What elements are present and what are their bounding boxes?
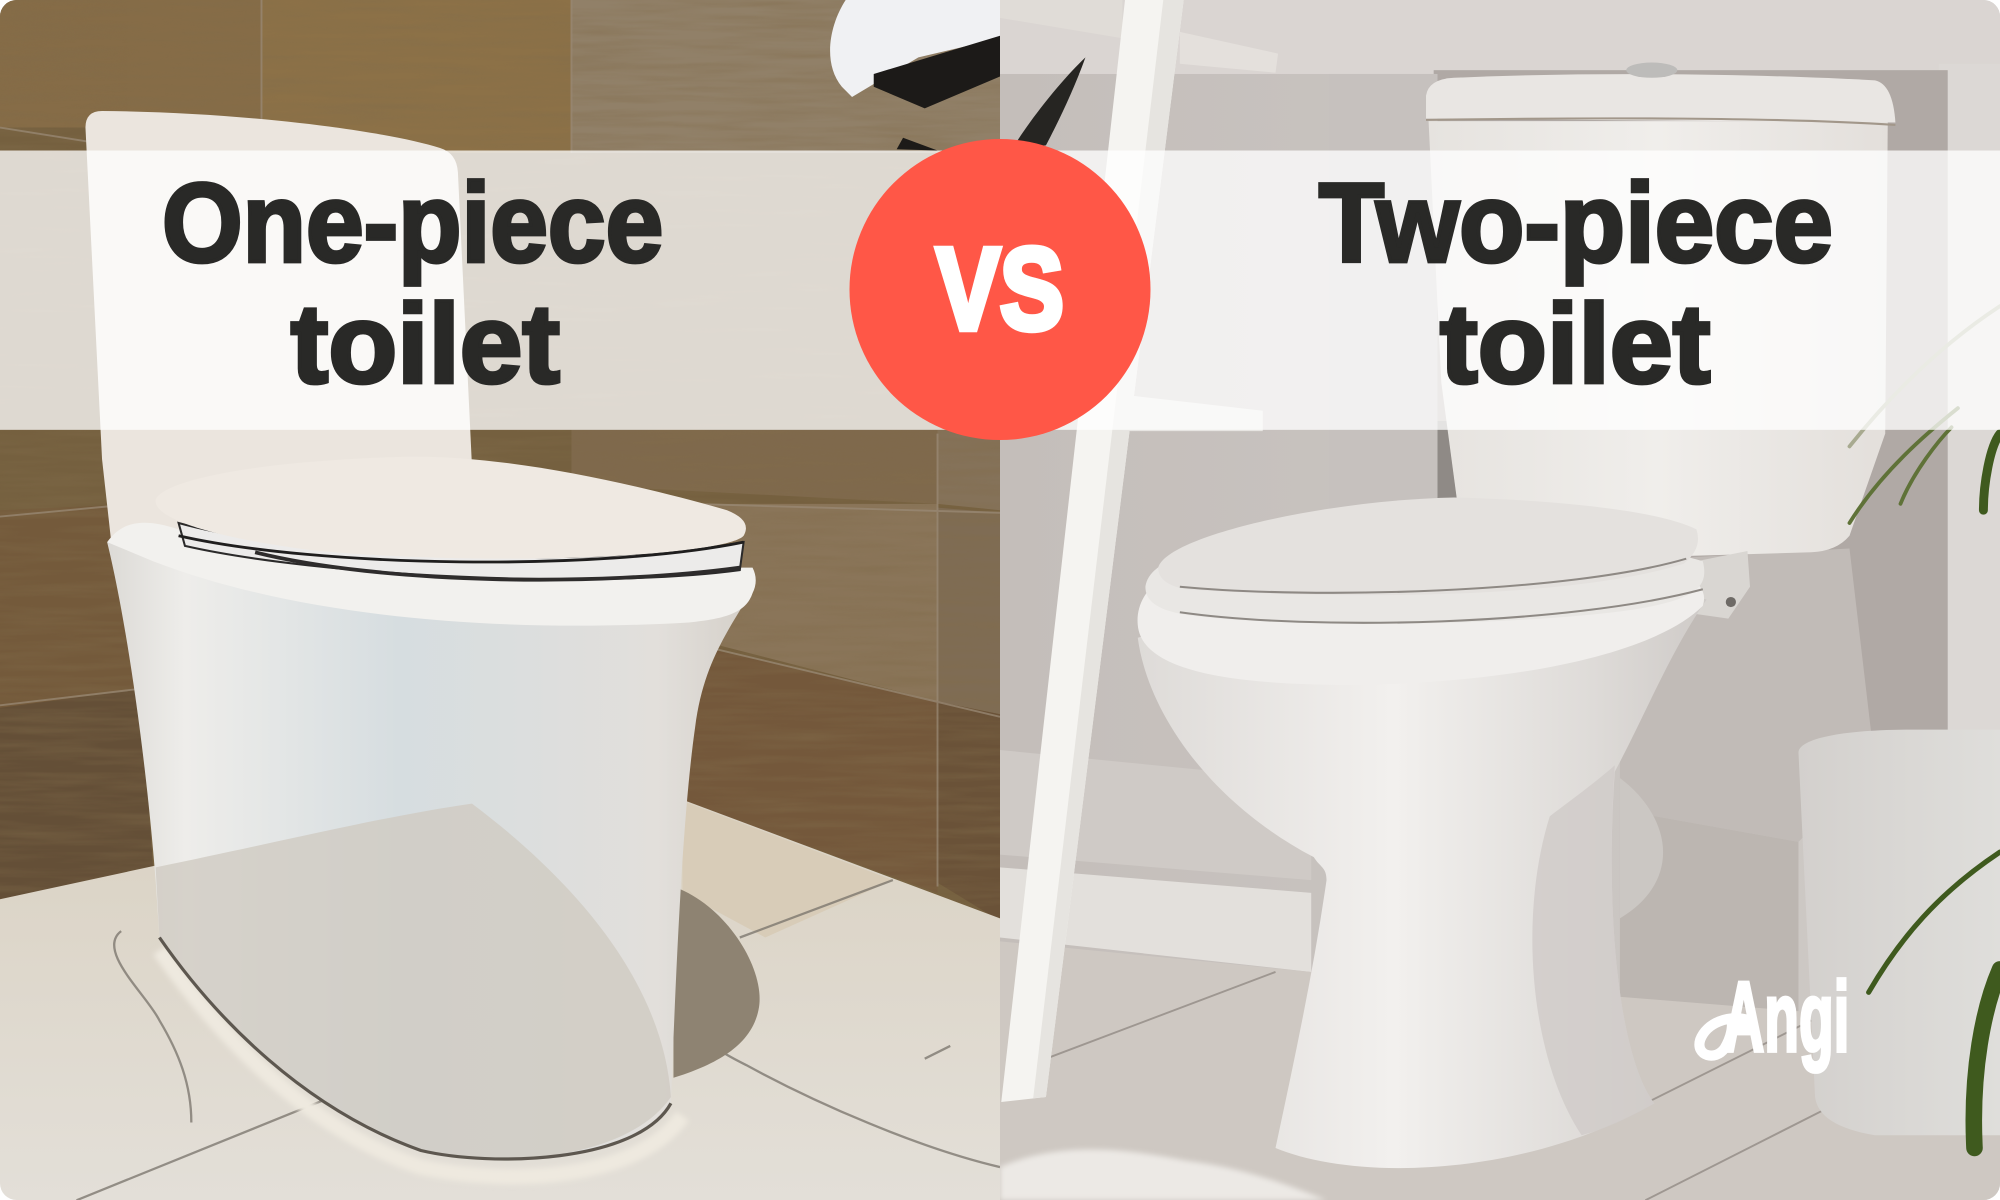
toilet body	[107, 542, 741, 1100]
heading: one-piece toilet: toilet	[291, 281, 560, 407]
wood floor	[1000, 941, 2000, 1200]
heading: one-piece toilet	[162, 159, 663, 407]
seat ring	[179, 523, 744, 579]
two-piece toilet	[1138, 62, 1895, 1168]
alcove behind tank	[1434, 70, 1948, 733]
pedestal shade	[1532, 765, 1654, 1135]
paper towel roll and holder	[830, 0, 1000, 151]
vs badge: VS	[936, 224, 1064, 354]
one-piece toilet	[85, 111, 756, 1159]
toilet back tank	[85, 111, 472, 538]
baseboard	[1000, 750, 1798, 1020]
logo: Angi: Angi	[1723, 962, 1849, 1073]
pedestal back	[1620, 778, 1663, 918]
bowl and pedestal	[1138, 587, 1707, 1168]
wood wall tiles	[0, 0, 1000, 969]
waste bin	[1798, 730, 2000, 1135]
floor sealant halo	[159, 950, 682, 1177]
flush button	[1626, 62, 1677, 78]
panel: two-piece toilet photo	[1000, 0, 2000, 1200]
lid	[1158, 498, 1698, 567]
lower wall right	[1620, 548, 1875, 842]
upper wall	[1000, 0, 2000, 74]
bowl rim	[1138, 586, 1704, 682]
seat	[1146, 558, 1704, 593]
seat lid	[156, 457, 746, 559]
right wall column	[1948, 74, 2000, 730]
rim	[107, 523, 756, 626]
hinge bracket	[1697, 551, 1750, 618]
rug	[1000, 1150, 1327, 1200]
plant leaves	[1849, 306, 2000, 1148]
marble floor	[0, 797, 1000, 1200]
toilet shadow on floor	[673, 886, 760, 1078]
logo: Angi	[1699, 962, 1849, 1073]
title band	[0, 151, 2000, 430]
body lower reflection	[156, 804, 671, 1159]
heading: one-piece toilet: One-piece	[162, 159, 663, 285]
heading: two-piece toilet	[1319, 159, 1833, 407]
dark leaf behind ladder	[1013, 57, 1085, 148]
panel: one-piece toilet photo	[0, 0, 1000, 1200]
heading: two-piece toilet: Two-piece	[1319, 159, 1833, 285]
tank lid	[1426, 74, 1895, 122]
wall	[1000, 0, 2000, 1200]
ladder and shelves	[1000, 0, 1278, 1102]
vs badge	[849, 139, 1151, 440]
base edge	[159, 938, 671, 1159]
heading: two-piece toilet: toilet	[1440, 281, 1710, 407]
tank body	[1429, 121, 1888, 561]
